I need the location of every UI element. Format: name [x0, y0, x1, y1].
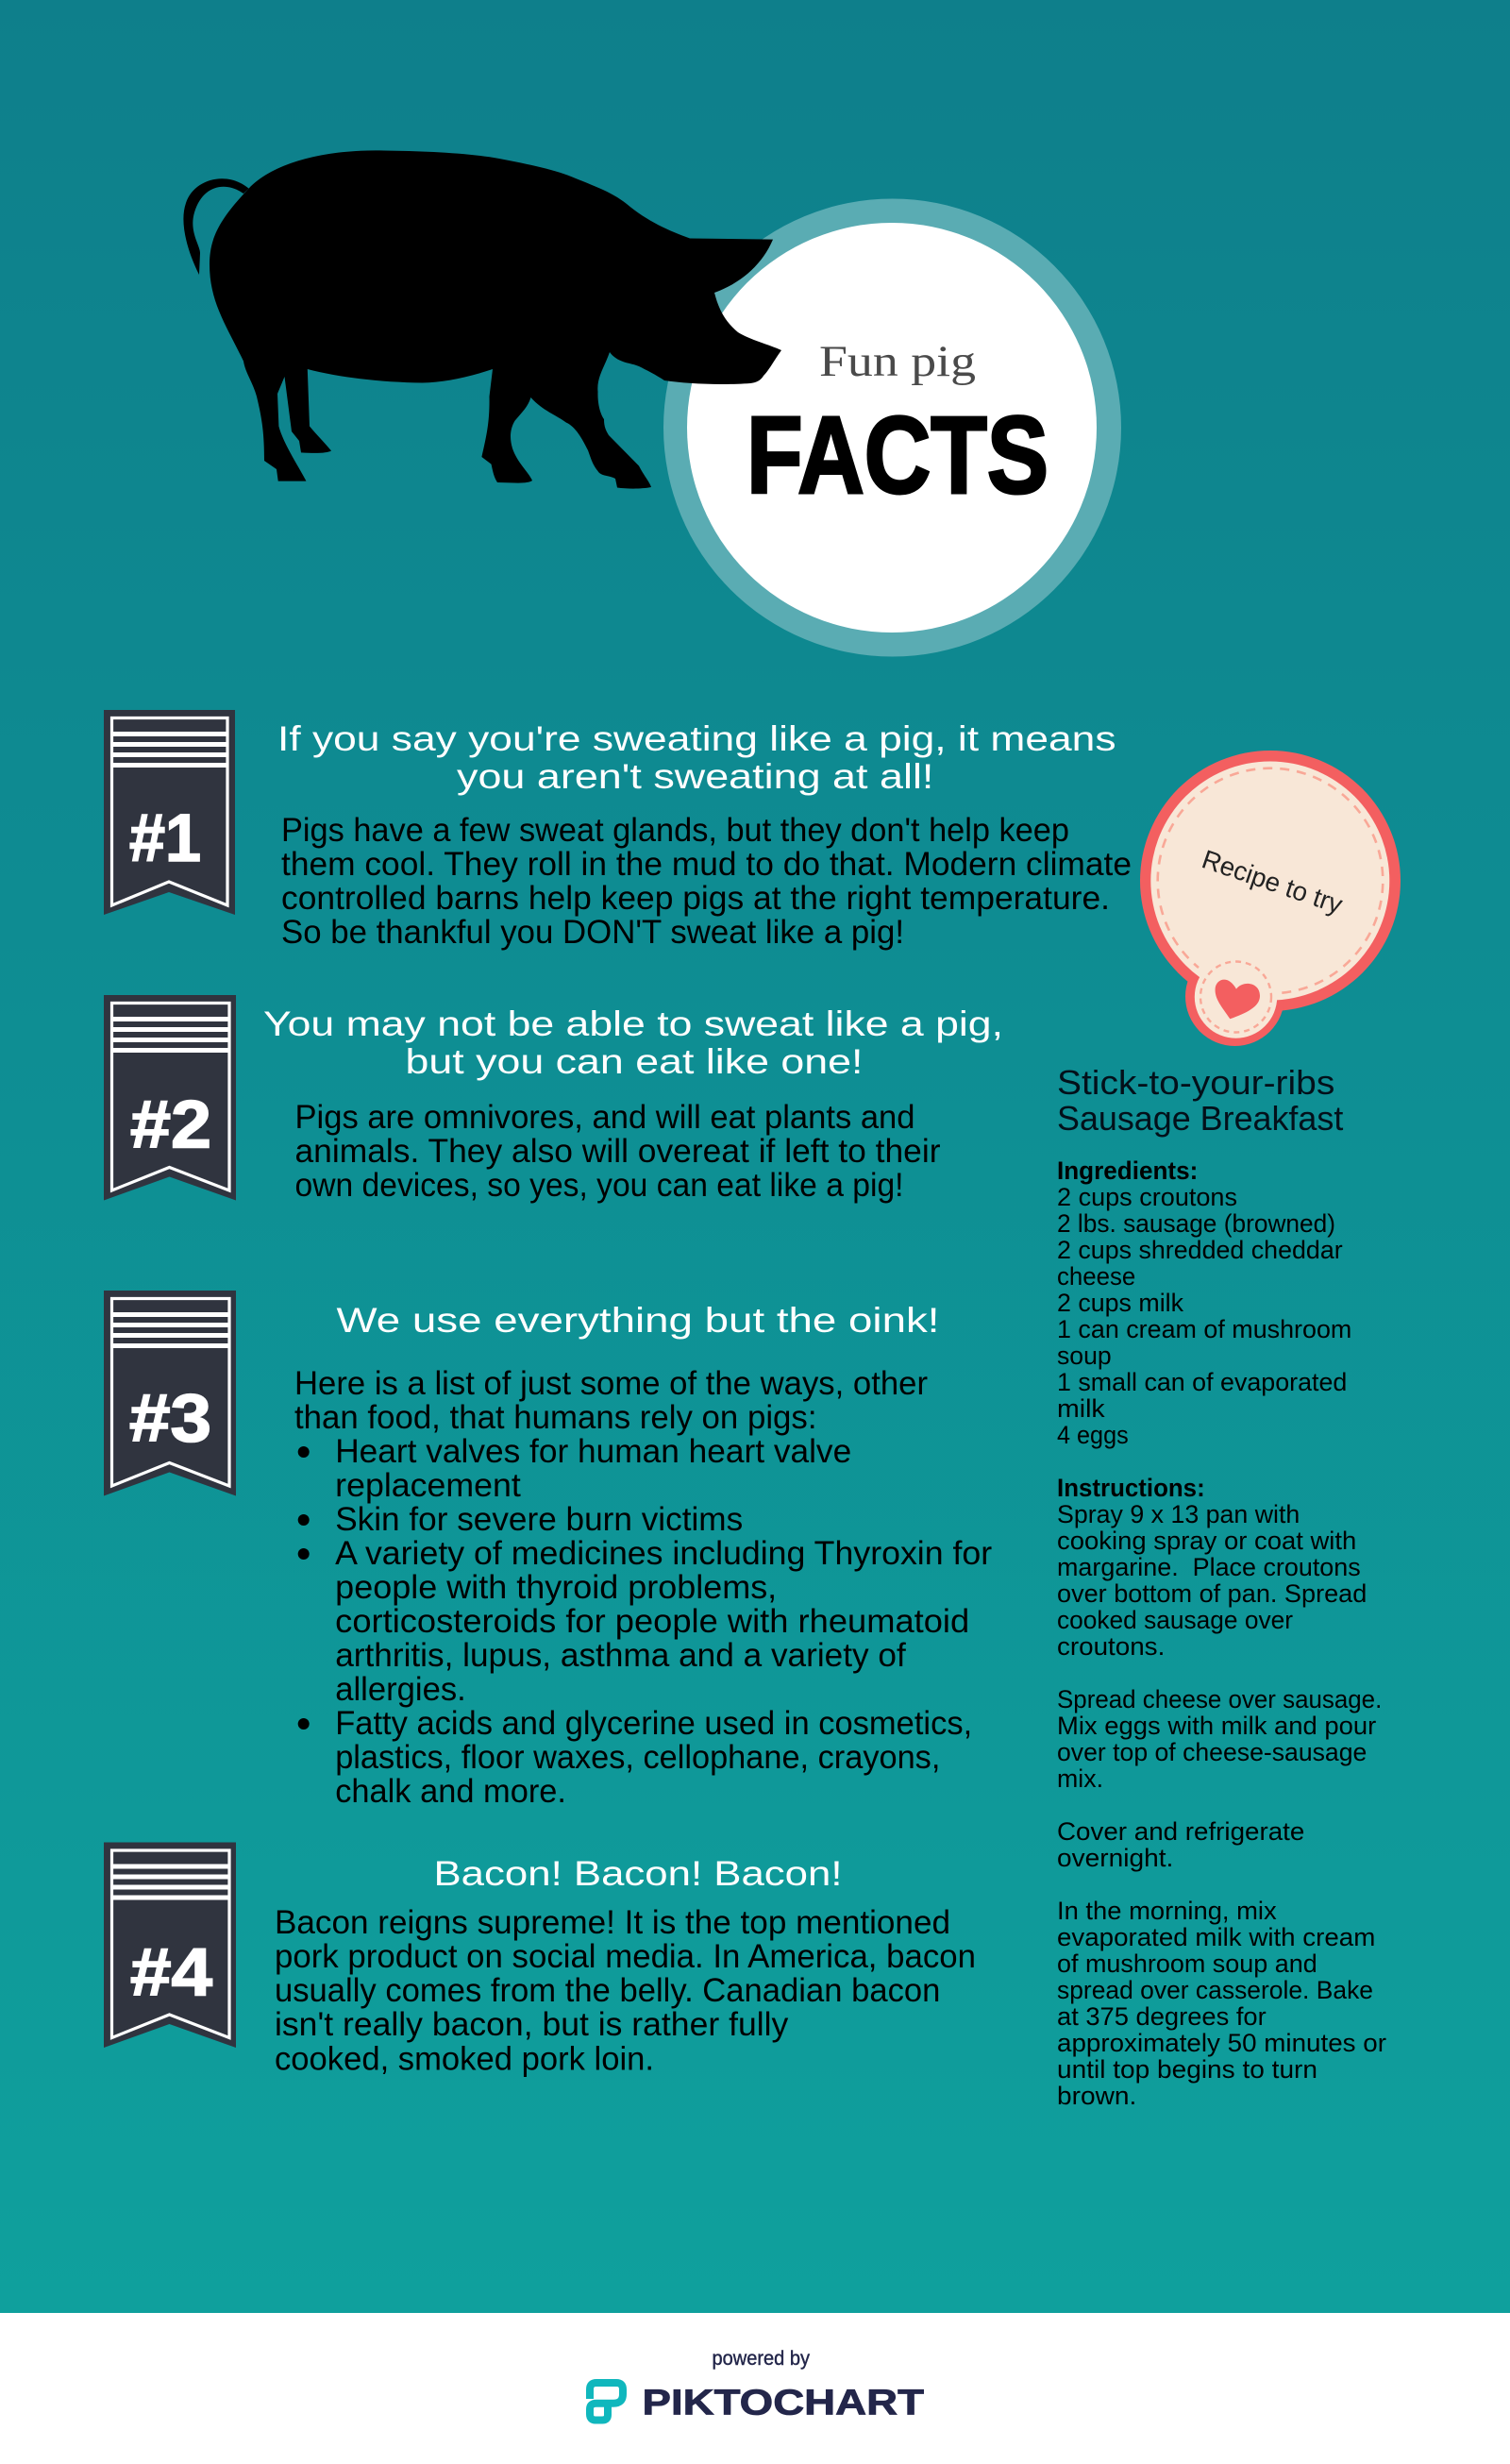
- ingredients: 2 cups croutons: [1057, 1183, 1237, 1211]
- fact 3 intro: Here is a list of just some of the ways, other: [294, 1364, 928, 1402]
- fact 3 ribbon: [104, 1291, 236, 1495]
- instructions: evaporated milk with cream: [1057, 1923, 1375, 1951]
- instructions: until top begins to turn: [1057, 2055, 1317, 2084]
- fact 4 body: usually comes from the belly. Canadian bacon: [275, 1971, 940, 2009]
- icon: piktochart logo: [590, 2383, 623, 2421]
- fact 1 ribbon: [104, 710, 235, 915]
- fact 4 ribbon: [104, 1843, 236, 2048]
- instructions: approximately 50 minutes or: [1057, 2029, 1386, 2057]
- fact 3 bullet list: corticosteroids for people with rheumatoid: [335, 1602, 969, 1640]
- fact 2 heading: but you can eat like one!: [406, 1042, 863, 1081]
- piktochart wordmark: PIKTOCHART: [642, 2384, 924, 2423]
- title badge circle: [663, 198, 1121, 657]
- ingredients: 2 cups shredded cheddar: [1057, 1236, 1343, 1264]
- fact 1 body: them cool. They roll in the mud to do that. Modern climate: [281, 845, 1132, 883]
- title: FACTS: FACTS: [747, 394, 1049, 516]
- instructions: Spray 9 x 13 pan with: [1057, 1500, 1300, 1528]
- instructions: croutons.: [1057, 1632, 1165, 1661]
- number 3: #3: [129, 1382, 211, 1456]
- fact 4 body: isn't really bacon, but is rather fully: [275, 2005, 789, 2043]
- recipe title: Sausage Breakfast: [1057, 1099, 1343, 1138]
- instructions: at 375 degrees for: [1057, 2002, 1267, 2031]
- fact 2 body: animals. They also will overeat if left to their: [294, 1132, 941, 1170]
- instructions: Mix eggs with milk and pour: [1057, 1712, 1376, 1740]
- fact 4 body: cooked, smoked pork loin.: [275, 2039, 654, 2077]
- ingredients: 1 small can of evaporated: [1057, 1368, 1347, 1396]
- fact 3 intro: than food, that humans rely on pigs:: [294, 1398, 817, 1436]
- fact 1 body: So be thankful you DON'T sweat like a pig!: [281, 913, 904, 951]
- ingredients: 4 eggs: [1057, 1421, 1129, 1449]
- icon: heart: [1216, 980, 1260, 1019]
- instructions: Instructions:: [1057, 1474, 1205, 1502]
- recipe title: [1057, 1063, 1343, 1138]
- fact 3 bullet list: Fatty acids and glycerine used in cosmetics,: [335, 1704, 972, 1742]
- instructions: cooking spray or coat with: [1057, 1527, 1356, 1555]
- instructions: overnight.: [1057, 1844, 1173, 1872]
- recipe sticker: [1140, 751, 1401, 1046]
- ingredients: cheese: [1057, 1262, 1135, 1291]
- instructions: brown.: [1057, 2082, 1136, 2110]
- fact 2 body: [294, 1098, 941, 1204]
- fact 3 bullet list: people with thyroid problems,: [335, 1568, 777, 1606]
- fact 4 heading: Bacon! Bacon! Bacon!: [434, 1854, 842, 1893]
- instructions: of mushroom soup and: [1057, 1949, 1317, 1978]
- instructions: mix.: [1057, 1764, 1103, 1793]
- fact 2 body: Pigs are omnivores, and will eat plants and: [294, 1098, 915, 1136]
- fact 4 body: [275, 1903, 976, 2077]
- instructions: spread over casserole. Bake: [1057, 1976, 1373, 2004]
- fact 3 bullet list: Skin for severe burn victims: [335, 1500, 743, 1538]
- fact 3 bullet list: arthritis, lupus, asthma and a variety of: [335, 1636, 906, 1674]
- fact 3 heading: We use everything but the oink!: [336, 1301, 940, 1340]
- fact 1 heading: [277, 719, 1116, 796]
- ingredients: 1 can cream of mushroom: [1057, 1315, 1351, 1343]
- instructions: Spread cheese over sausage.: [1057, 1685, 1382, 1713]
- instructions: Cover and refrigerate: [1057, 1817, 1304, 1846]
- fact 2 heading: [263, 1004, 1003, 1081]
- ingredients: 2 lbs. sausage (browned): [1057, 1209, 1335, 1238]
- ingredients: Ingredients:: [1057, 1156, 1198, 1185]
- fact 3 bullet list: allergies.: [335, 1670, 466, 1708]
- fact 1 text: [277, 719, 1132, 951]
- fact 2 text: [263, 1004, 1003, 1204]
- footer: [0, 2313, 1510, 2464]
- fact 3 bullet list: replacement: [335, 1466, 521, 1504]
- fact 1 body: Pigs have a few sweat glands, but they don't help keep: [281, 811, 1069, 849]
- instructions: over bottom of pan. Spread: [1057, 1579, 1367, 1608]
- number 2: #2: [130, 1088, 211, 1163]
- ingredients: soup: [1057, 1342, 1112, 1370]
- fact 1 body: controlled barns help keep pigs at the right temperature.: [281, 879, 1110, 917]
- fact 1 heading: you aren't sweating at all!: [457, 757, 933, 796]
- fact 4 body: Bacon reigns supreme! It is the top mentioned: [275, 1903, 950, 1941]
- fact 2 heading: You may not be able to sweat like a pig,: [263, 1004, 1003, 1043]
- instructions: margarine. Place croutons: [1057, 1553, 1361, 1581]
- instructions: cooked sausage over: [1057, 1606, 1293, 1634]
- instructions: In the morning, mix: [1057, 1897, 1277, 1925]
- ingredients: 2 cups milk: [1057, 1289, 1183, 1317]
- title: Fun pig: Fun pig: [819, 337, 976, 386]
- sticker label: Recipe to try: [1199, 844, 1346, 920]
- recipe title: Stick-to-your-ribs: [1057, 1063, 1334, 1102]
- fact 4 text: [275, 1854, 976, 2077]
- fact 3 bullet list: A variety of medicines including Thyroxin for: [335, 1534, 992, 1572]
- number 1: #1: [129, 802, 201, 876]
- fact 3 intro: [294, 1364, 928, 1436]
- instructions: over top of cheese-sausage: [1057, 1738, 1367, 1766]
- fact 3 bullet list: chalk and more.: [335, 1772, 566, 1810]
- fact 2 body: own devices, so yes, you can eat like a pig!: [294, 1166, 904, 1204]
- fact 1 heading: If you say you're sweating like a pig, it means: [277, 719, 1116, 758]
- ingredients: milk: [1057, 1394, 1105, 1423]
- fact 3 bullet list: [298, 1432, 992, 1810]
- fact 3 text: [294, 1301, 992, 1810]
- icon: pig silhouette: [183, 150, 781, 489]
- ingredients: [1057, 1156, 1351, 1449]
- fact 4 body: pork product on social media. In America, bacon: [275, 1937, 976, 1975]
- instructions: [1057, 1474, 1386, 2110]
- fact 2 ribbon: [104, 995, 236, 1201]
- powered by: powered by: [712, 2348, 810, 2370]
- recipe column: [1057, 1063, 1386, 2110]
- fact 1 body: [281, 811, 1132, 951]
- fact 3 bullet list: Heart valves for human heart valve: [335, 1432, 851, 1470]
- fact 3 bullet list: plastics, floor waxes, cellophane, crayons,: [335, 1738, 940, 1776]
- number 4: #4: [130, 1935, 213, 2011]
